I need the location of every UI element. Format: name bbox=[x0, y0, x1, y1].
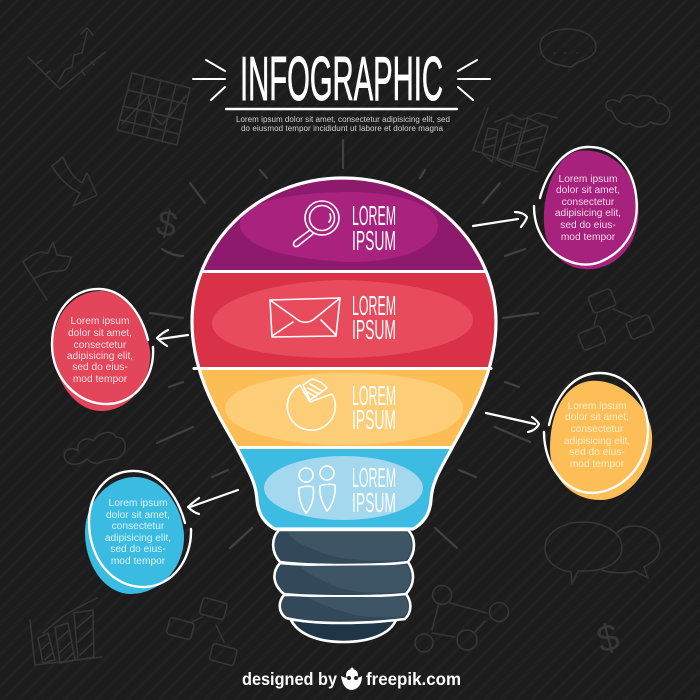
light bulb: LOREM bbox=[352, 200, 396, 231]
callout fill bbox=[85, 477, 184, 594]
callout outline bbox=[544, 373, 648, 493]
doodle: bar chart top right bbox=[473, 108, 557, 172]
doodle: flow diagram right bbox=[578, 288, 654, 351]
arrow to red callout bbox=[157, 330, 188, 346]
title left rays bbox=[193, 60, 225, 100]
callout text: sed do eius- bbox=[110, 544, 166, 555]
credit: freepik.com: freepik.com bbox=[366, 669, 461, 689]
title underline bbox=[226, 108, 457, 110]
callout text: sed do eius- bbox=[569, 447, 625, 458]
band: red bbox=[194, 272, 494, 367]
callout text: dolor sit amet, bbox=[68, 328, 132, 339]
doodle: bar chart bottom left bbox=[30, 598, 102, 665]
title bbox=[193, 45, 490, 133]
callout: red bbox=[52, 289, 188, 411]
callout text: mod tempor bbox=[73, 374, 128, 385]
arrow to yellow callout bbox=[486, 413, 539, 432]
callout text: adipisicing elit, bbox=[564, 436, 630, 447]
callout text: adipisicing elit, bbox=[105, 533, 171, 544]
callout text: mod tempor bbox=[561, 232, 616, 243]
band dividers bbox=[194, 272, 491, 448]
credit: designed by: designed by bbox=[242, 669, 337, 689]
callout fill bbox=[53, 291, 150, 411]
callout text: sed do eius- bbox=[72, 362, 128, 373]
band: purple bbox=[204, 180, 484, 270]
arrow to blue callout bbox=[188, 490, 238, 514]
callout text: adipisicing elit, bbox=[555, 208, 621, 219]
thread highlights bbox=[287, 532, 411, 617]
doodle: flow diagram bottom left bbox=[166, 597, 238, 666]
callout fill bbox=[550, 381, 652, 500]
light bulb: LOREM bbox=[352, 462, 396, 493]
doodle: network bbox=[415, 586, 508, 652]
band: blue bbox=[239, 449, 450, 528]
doodle: speech bubble bbox=[540, 29, 596, 67]
callout text: Lorem ipsum bbox=[71, 316, 129, 327]
callout fill bbox=[544, 150, 639, 269]
light bulb: IPSUM bbox=[352, 487, 396, 518]
thread 3 bbox=[280, 594, 410, 623]
callout text: dolor sit amet, bbox=[565, 412, 629, 423]
light bulb: LOREM bbox=[352, 290, 396, 321]
callout text: adipisicing elit, bbox=[67, 351, 133, 362]
doodle: rising line chart bbox=[28, 28, 105, 89]
callout text: consectetur bbox=[74, 340, 127, 351]
callout text: sed do eius- bbox=[560, 220, 616, 231]
callout: blue bbox=[85, 471, 238, 594]
callout text: mod tempor bbox=[570, 459, 625, 470]
doodle: two speech bubbles bbox=[545, 522, 660, 584]
light bulb: LOREM bbox=[352, 380, 396, 411]
thread 1 bbox=[273, 530, 414, 565]
callout text: mod tempor bbox=[111, 556, 166, 567]
callout text: dolor sit amet, bbox=[556, 185, 620, 196]
title right rays bbox=[458, 60, 490, 100]
callout text: Lorem ipsum bbox=[568, 401, 626, 412]
thread 2 bbox=[274, 562, 413, 596]
bulb outline bbox=[192, 178, 496, 529]
light bulb: IPSUM bbox=[352, 225, 396, 256]
label 3: pie chart and text bbox=[287, 379, 396, 435]
callout outline bbox=[52, 289, 153, 404]
icon: magnifying glass bbox=[294, 201, 339, 247]
doodle: flag bbox=[23, 242, 71, 300]
label 2: envelope and text bbox=[270, 290, 396, 345]
subtitle: Lorem ipsum dolor sit amet, consectetur adipisicing elit, sed bbox=[236, 115, 450, 124]
doodle: grid chart bbox=[117, 73, 190, 145]
callout text: consectetur bbox=[571, 424, 624, 435]
icon: freepik mascot bbox=[341, 668, 362, 690]
light bulb: IPSUM bbox=[352, 314, 396, 345]
callout outline bbox=[534, 147, 637, 264]
label 1: magnifier and text bbox=[294, 200, 396, 256]
title: INFOGRAPHIC bbox=[240, 45, 443, 114]
bulb screw base bbox=[273, 530, 414, 642]
icon: two people bbox=[299, 466, 335, 513]
callout text: consectetur bbox=[112, 521, 165, 532]
arrow to purple callout bbox=[473, 212, 527, 227]
doodle: cloud top right bbox=[606, 95, 670, 127]
doodle: dollar sign bottom right: $ bbox=[593, 616, 624, 662]
label 4: people and text bbox=[299, 462, 396, 518]
footer credit bbox=[242, 668, 461, 690]
icon: envelope bbox=[270, 298, 340, 337]
subtitle: do eiusmod tempor incididunt ut labore et dolore magna bbox=[241, 124, 444, 133]
callout: yellow bbox=[486, 373, 652, 500]
bulb glass bands bbox=[194, 180, 494, 528]
doodle: cloud left bbox=[64, 432, 125, 464]
base cap bbox=[291, 620, 396, 642]
callout text: consectetur bbox=[562, 197, 615, 208]
callout outline bbox=[89, 471, 191, 587]
light rays around the bulb bbox=[150, 140, 538, 548]
icon: pie chart bbox=[287, 379, 335, 430]
doodle: dollar sign: $ bbox=[153, 201, 181, 246]
light bulb: IPSUM bbox=[352, 404, 396, 435]
callout text: Lorem ipsum bbox=[109, 498, 167, 509]
band: yellow bbox=[201, 370, 487, 446]
doodle: curved arrow bbox=[52, 157, 97, 206]
callout text: Lorem ipsum bbox=[559, 174, 617, 185]
callout: purple bbox=[473, 147, 639, 269]
callout text: dolor sit amet, bbox=[106, 510, 170, 521]
light bulb bbox=[180, 170, 510, 642]
